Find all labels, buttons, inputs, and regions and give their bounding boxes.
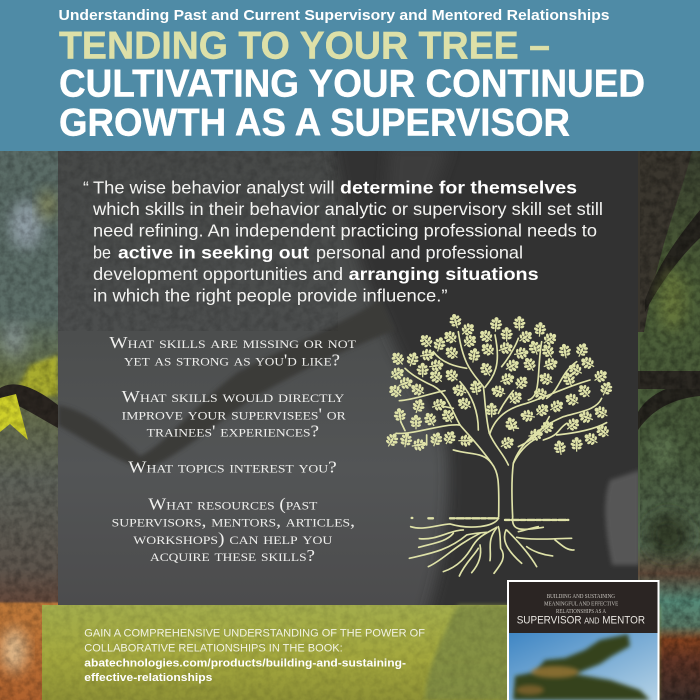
cover title small: MEANINGFUL AND EFFECTIVE bbox=[544, 600, 618, 608]
question four bbox=[112, 494, 355, 565]
question two: trainees' experiences? bbox=[147, 422, 319, 441]
title line one: TENDING TO YOUR TREE – bbox=[59, 24, 550, 67]
question four: workshops) can help you bbox=[133, 529, 333, 548]
quote: The wise behavior analyst will bbox=[93, 177, 335, 197]
call-to-action text: COLLABORATIVE RELATIONSHIPS IN THE BOOK: bbox=[84, 643, 343, 655]
quote: be bbox=[93, 242, 111, 262]
question four: supervisors, mentors, articles, bbox=[112, 512, 355, 531]
quote: need refining. An independent practicing professional needs to bbox=[93, 221, 597, 241]
quote: in which the right people provide influence.” bbox=[93, 286, 448, 306]
call-to-action text: GAIN A COMPREHENSIVE UNDERSTANDING OF THE POWER OF bbox=[84, 628, 426, 640]
question two: improve your supervisees' or bbox=[122, 405, 346, 424]
title line three: GROWTH AS A SUPERVISOR bbox=[59, 101, 570, 144]
call-to-action text bbox=[84, 628, 426, 684]
call-to-action text: effective-relationships bbox=[84, 672, 212, 684]
question one: yet as strong as you'd like? bbox=[124, 351, 340, 370]
green call-to-action panel bbox=[42, 605, 659, 700]
tree leaves bbox=[383, 312, 615, 456]
question three: What topics interest you? bbox=[128, 458, 337, 477]
call-to-action text: abatechnologies.com/products/building-and-sustaining- bbox=[84, 658, 407, 670]
tree roots bbox=[409, 517, 574, 576]
quote: determine for themselves bbox=[340, 177, 577, 197]
translucent dark panel bbox=[58, 151, 638, 605]
cover title small: RELATIONSHIPS AS A bbox=[556, 608, 606, 615]
header subtitle: Understanding Past and Current Supervisory and Mentored Relationships bbox=[58, 8, 610, 24]
quote: development opportunities and bbox=[93, 264, 343, 284]
header band bbox=[0, 0, 700, 151]
question four: acquire these skills? bbox=[150, 546, 315, 565]
forest photo background bbox=[0, 151, 700, 700]
question two bbox=[122, 387, 346, 441]
quote: which skills in their behavior analytic or supervisory skill set still bbox=[92, 199, 603, 219]
question one bbox=[109, 333, 357, 370]
tree branches and trunk bbox=[396, 332, 607, 517]
cover title small bbox=[544, 593, 618, 615]
quote: active in seeking out bbox=[118, 242, 309, 262]
question one: What skills are missing or not bbox=[109, 333, 357, 352]
cover title small: BUILDING AND SUSTAINING bbox=[547, 593, 615, 600]
book cover bbox=[507, 580, 660, 700]
quote: arranging situations bbox=[349, 264, 539, 284]
quote: personal and professional bbox=[316, 242, 523, 262]
tree illustration bbox=[383, 312, 615, 576]
cover photo tree bbox=[513, 634, 650, 700]
cover title large: SUPERVISOR AND MENTOR bbox=[517, 614, 645, 626]
title line two: CULTIVATING YOUR CONTINUED bbox=[59, 63, 645, 106]
question four: What resources (past bbox=[148, 494, 318, 513]
quote bbox=[83, 177, 603, 306]
question two: What skills would directly bbox=[122, 387, 345, 406]
quote: “ bbox=[83, 177, 89, 197]
reflection questions bbox=[109, 333, 357, 565]
